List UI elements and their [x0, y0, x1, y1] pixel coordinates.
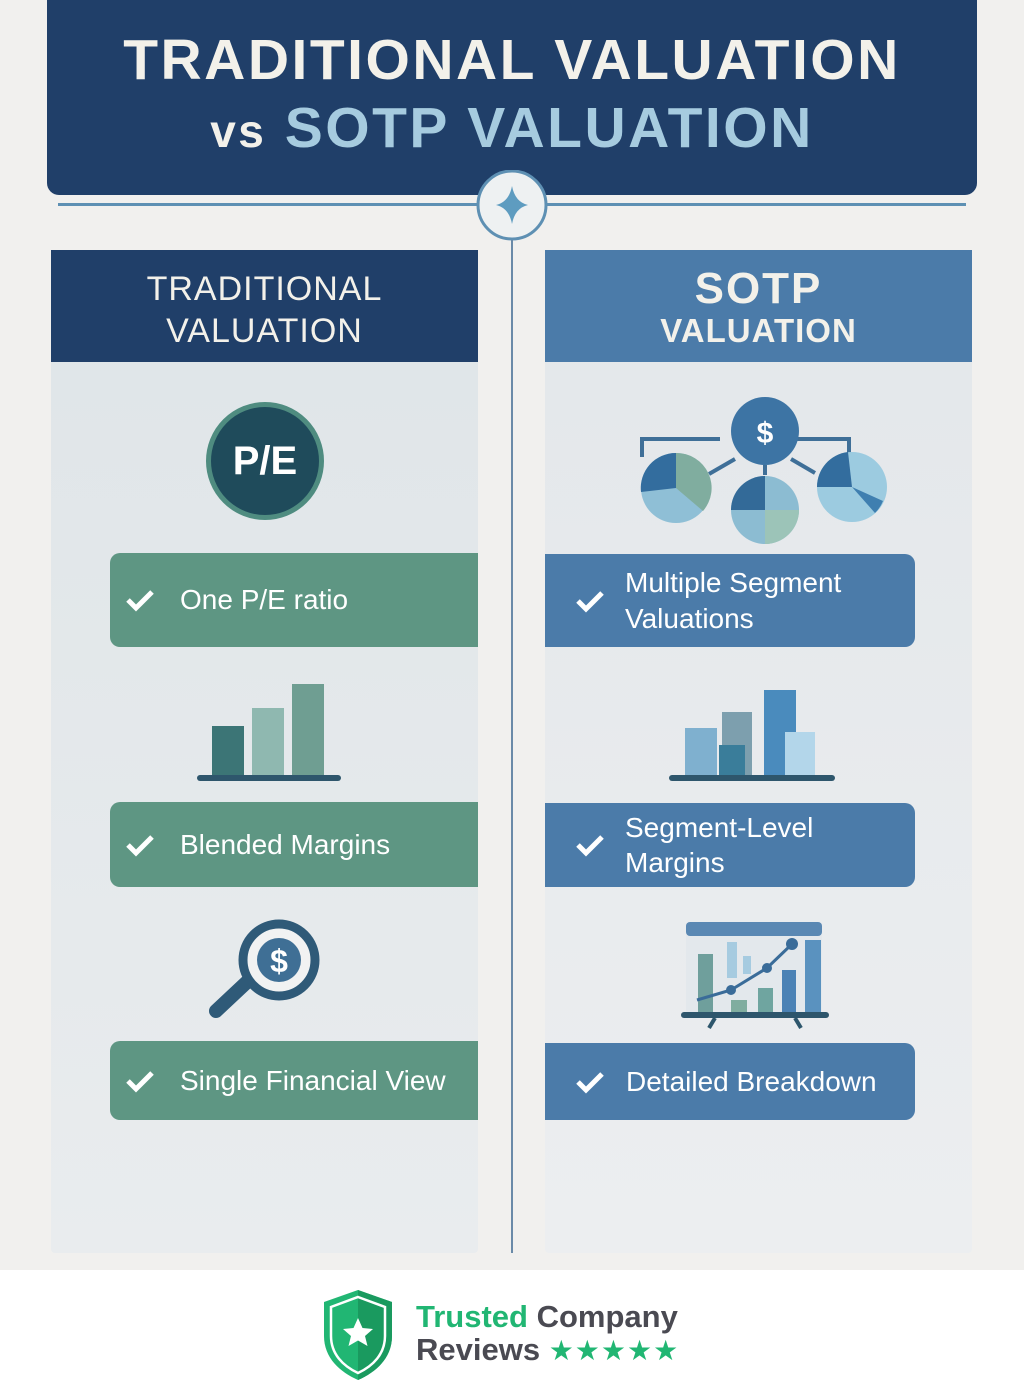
item: segment-level margins: Margins	[625, 847, 725, 878]
icon: segment pie tree	[640, 397, 887, 544]
item: detailed breakdown: Detailed Breakdown	[626, 1066, 877, 1096]
item: detailed breakdown	[545, 1043, 915, 1120]
icon: segment pie tree: $	[757, 417, 774, 450]
footer band	[0, 1270, 1024, 1400]
icon: P/E circle: P/E	[233, 438, 297, 482]
icon: segmented bar chart	[669, 690, 835, 781]
icon: magnifier dollar: $	[270, 943, 288, 979]
item: multiple segment valuations: Valuations	[625, 602, 754, 634]
title: TRADITIONAL VALUATION	[123, 28, 901, 92]
panel heading: TRADITIONAL	[147, 270, 382, 308]
item: one P/E ratio: One P/E ratio	[180, 584, 348, 615]
panel heading: SOTP	[695, 264, 822, 313]
divider line with star badge	[58, 170, 966, 240]
panel heading	[51, 250, 478, 362]
item: blended margins	[110, 802, 478, 887]
icon: magnifier dollar	[209, 920, 320, 1018]
panel: SOTP valuation	[545, 250, 972, 1253]
panel heading: VALUATION	[166, 312, 363, 350]
item: one P/E ratio	[110, 553, 478, 647]
panel: traditional valuation	[51, 250, 478, 1253]
item: segment-level margins	[545, 803, 915, 887]
item: blended margins: Blended Margins	[180, 828, 390, 860]
item: single financial view: Single Financial View	[180, 1064, 446, 1096]
panel heading	[545, 250, 972, 362]
item: multiple segment valuations	[545, 554, 915, 647]
icon: star badge	[476, 170, 548, 240]
icon: shield	[324, 1290, 392, 1380]
title: vs SOTP VALUATION	[210, 96, 814, 160]
panel heading: VALUATION	[660, 312, 857, 349]
title	[123, 28, 901, 160]
logo: trusted company reviews	[324, 1290, 679, 1380]
text: trusted company reviews	[416, 1299, 679, 1367]
icon: P/E circle	[206, 402, 324, 520]
icon: bar chart	[197, 684, 341, 781]
header banner	[47, 0, 977, 195]
icon: presentation board	[681, 922, 829, 1029]
text: trusted company reviews: Trusted Company	[416, 1299, 678, 1334]
item: segment-level margins: Segment-Level	[625, 812, 813, 843]
item: single financial view	[110, 1041, 478, 1120]
text: trusted company reviews: Reviews ★★★★★	[416, 1332, 679, 1367]
item: multiple segment valuations: Multiple Segment	[625, 566, 841, 598]
